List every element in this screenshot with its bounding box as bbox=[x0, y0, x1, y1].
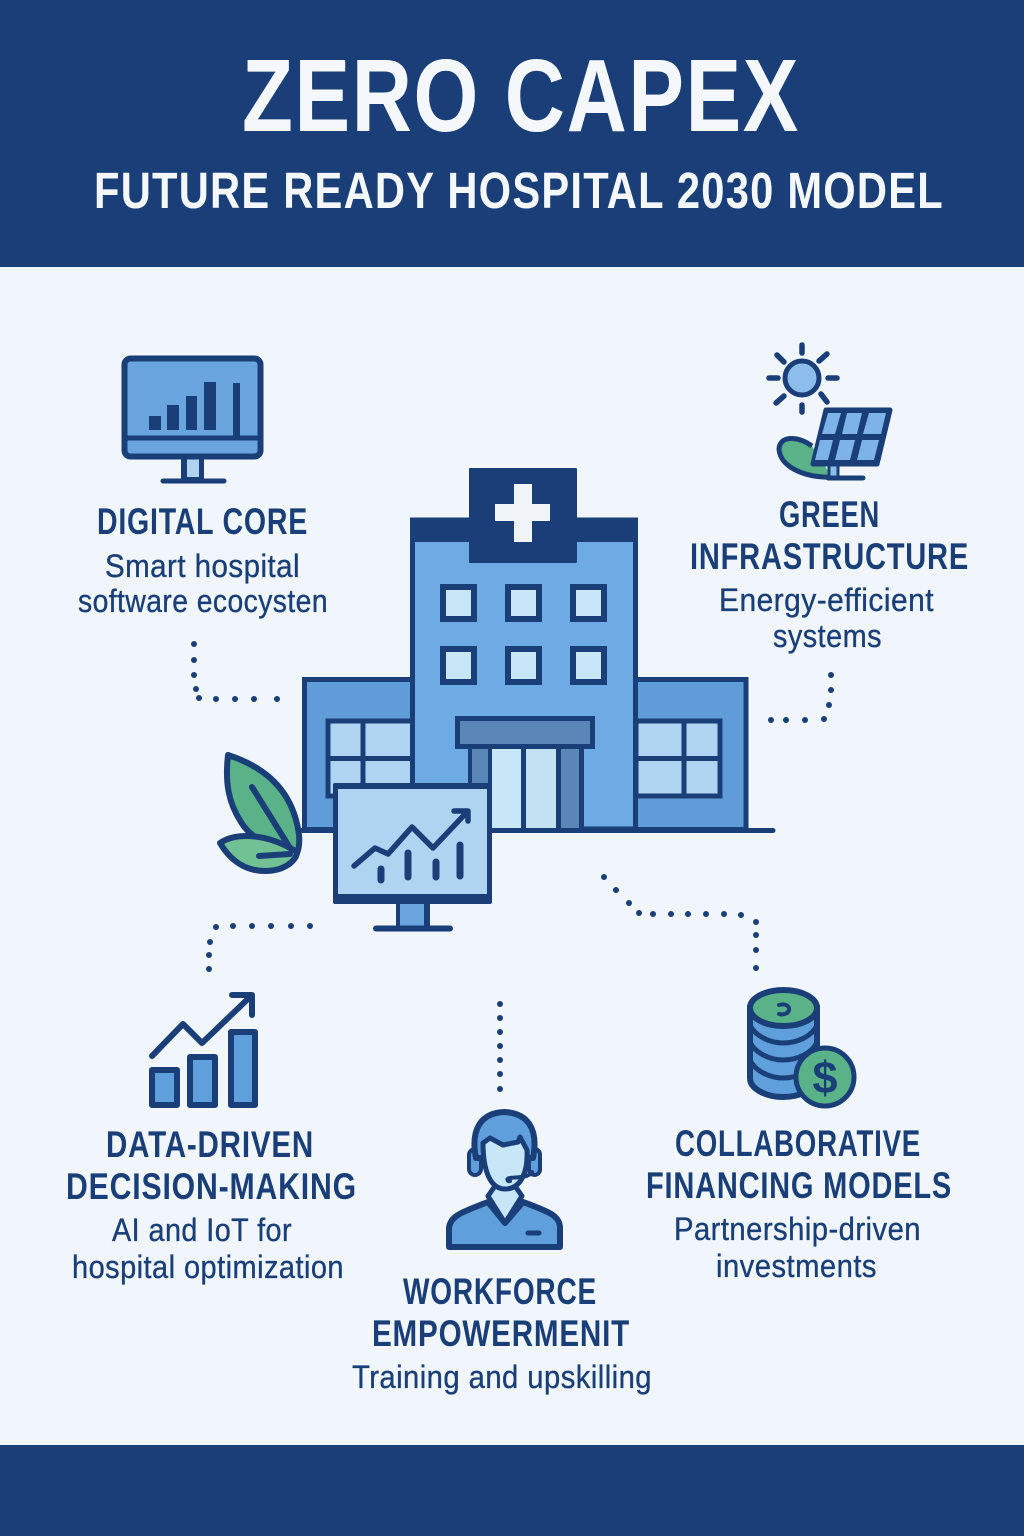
footer banner bbox=[0, 1445, 1024, 1536]
heading: DECISION-MAKING bbox=[66, 1166, 357, 1207]
right wing bbox=[634, 680, 746, 830]
icon: leaves bbox=[220, 755, 299, 871]
heading: EMPOWERMENIT bbox=[372, 1313, 630, 1354]
description: AI and IoT for bbox=[112, 1212, 292, 1248]
description: hospital optimization bbox=[72, 1249, 344, 1285]
central hospital illustration bbox=[220, 468, 773, 928]
connector: data-driven bbox=[206, 923, 313, 972]
heading bbox=[690, 494, 969, 577]
connector: green infrastructure bbox=[768, 672, 834, 723]
connector: workforce bbox=[497, 1001, 503, 1092]
panel: digital core bbox=[78, 358, 328, 619]
tower windows bbox=[443, 587, 604, 682]
left wing bbox=[304, 680, 414, 830]
panel: data-driven decision-making bbox=[66, 995, 357, 1285]
description: software ecocysten bbox=[78, 583, 328, 619]
heading bbox=[66, 1124, 357, 1207]
heading: DATA-DRIVEN bbox=[106, 1124, 314, 1165]
icon: person with headset bbox=[449, 1112, 560, 1247]
description bbox=[674, 1211, 921, 1284]
description: Training and upskilling bbox=[352, 1359, 652, 1395]
panel: green infrastructure bbox=[690, 345, 969, 654]
title: ZERO CAPEX bbox=[242, 38, 800, 153]
icon: computer monitor bbox=[124, 358, 260, 481]
icon: coin stack with dollar bbox=[750, 990, 854, 1106]
icon: analytics monitor bbox=[333, 783, 492, 928]
heading: COLLABORATIVE bbox=[675, 1123, 921, 1164]
main tower bbox=[410, 468, 638, 829]
ground line bbox=[302, 828, 773, 833]
description bbox=[78, 548, 328, 619]
connector: digital core bbox=[191, 641, 280, 702]
panel: collaborative financing models bbox=[646, 990, 952, 1284]
icon: coin stack with dollar: $ bbox=[812, 1052, 838, 1103]
description: investments bbox=[716, 1248, 877, 1284]
description bbox=[72, 1212, 344, 1285]
panel: workforce empowerment bbox=[352, 1112, 652, 1395]
header banner bbox=[0, 0, 1024, 267]
icon: sun and solar panel bbox=[769, 345, 890, 478]
description: Energy-efficient bbox=[719, 582, 934, 618]
heading bbox=[646, 1123, 952, 1206]
description: Smart hospital bbox=[105, 548, 300, 584]
icon: medical cross bbox=[495, 484, 550, 542]
icon: growth bar chart bbox=[152, 995, 255, 1105]
heading: WORKFORCE bbox=[403, 1271, 597, 1312]
description: systems bbox=[773, 618, 882, 654]
heading: DIGITAL CORE bbox=[97, 501, 308, 542]
description: Partnership-driven bbox=[674, 1211, 921, 1247]
connector: financing bbox=[601, 874, 759, 971]
heading bbox=[372, 1271, 630, 1354]
hospital entrance bbox=[458, 718, 592, 829]
heading: GREEN bbox=[779, 494, 880, 535]
description bbox=[719, 582, 934, 654]
